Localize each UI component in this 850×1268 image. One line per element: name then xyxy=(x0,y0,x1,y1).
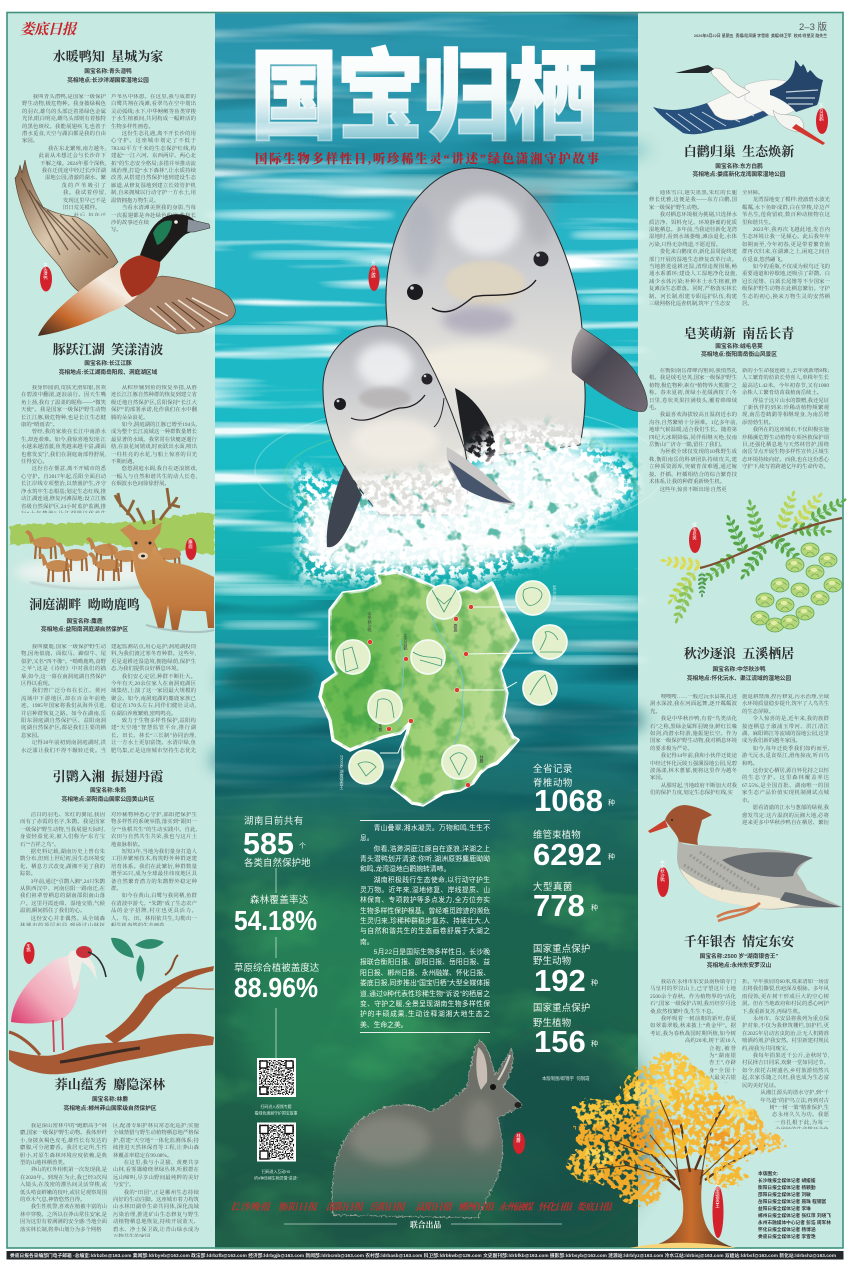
article: Chinese honey locust 皂荚萌新: 国宝名称:绒毛皂荚 xyxy=(715,344,763,350)
data column right xyxy=(533,763,615,1059)
big porpoise xyxy=(386,168,647,465)
article: forest musk deer 莽山蕴秀: 莽山的红外相机第一次发现我,是在2020年。到现在为止,我已经3次闯入镜头,在茂密的灌丛间灵活穿梭,或低头啃食鲜嫩的枝叶,或驻足观察周围的草木气息,神情悠然自得。 xyxy=(20,1167,107,1203)
article: Chinese honey locust 皂荚萌新: 新的小生命接连破土,去年就新增8株;人工繁育的幼苗长势喜人,单株年生长最高达1.42米。今年初春节,又有1000余株人工繁育幼苗栽植南岳续土。 xyxy=(742,368,829,396)
article: forest musk deer 莽山蕴秀: 我生性机警,喜欢在植被丰富的山林中穿梭。之所以在莽山常住安家,是因为这里有着满满的安全感:当地全面落实林长制,将莽山划分为多个网格 xyxy=(20,1204,107,1233)
article: scaly-sided merganser 秋沙逐浪: 秋沙逐浪 五溪栖居 xyxy=(684,646,794,661)
article: scaly-sided merganser 秋沙逐浪: 如今,每年迁徙季我们如约而至,游弋沅水,觅食渠江,滑角掠夜,听百鸟和鸣。 xyxy=(742,746,829,767)
article: river dolphin 豚跃江湖: 国宝名称:长江江豚 xyxy=(84,361,132,367)
article: tufted duck 水暖鸭知: 芦苇丛中休憩。在这里,我与成群的白鹭共翔在浅滩,看翠鸟在空中划出灵动弧线;水下,中华鳑鲏等鱼类穿梭于水生植被间,共同构成一幅鲜活的生物多样性画卷。 xyxy=(111,94,196,130)
data column right: 种 xyxy=(591,905,598,912)
article: tufted duck 水暖鸭知: 水暖鸭知 星城为家 xyxy=(53,49,163,64)
illustration: scaly-sided merganser xyxy=(648,805,842,921)
article: forest musk deer 莽山蕴秀: 莽山蕴秀 麝隐深林 xyxy=(55,1077,165,1092)
seal: crested ibis xyxy=(24,942,34,964)
illustration: Baer's pochard in flight xyxy=(15,160,235,336)
map connector lines xyxy=(380,607,533,753)
illustration: crested ibis on branch xyxy=(9,938,214,1074)
map location labels: 东方白鹳 xyxy=(404,633,408,651)
seal: forest musk deer xyxy=(513,1132,525,1154)
article: tufted duck 水暖鸭知: 亮相地点:长沙洋湖国家湿地公园 xyxy=(67,78,149,84)
reporter credits: 娄底日报全媒体记者 李雪艳 xyxy=(758,1234,816,1239)
article: tufted duck 水暖鸭知: 我叫青头潜鸭,是国家一级保护野生动物,极危物种。我身披绿褐色的羽衣,雄鸟的头部泛着墨绿色金属光泽,眼白明亮,雌鸟头部则有着独特的黑色斑纹。我能展翅疾飞,也善于潜水觅食,天空与湖泊都是我的自由家园。 xyxy=(22,94,106,144)
data column left: 草原综合植被盖度达 xyxy=(234,962,319,973)
partner newspaper logos: 永州融媒 xyxy=(498,1201,535,1213)
article: scaly-sided merganser 秋沙逐浪: 从那时起,当地政府不断加大对我们的保护力度,划定生态保护红线,实 xyxy=(650,783,737,796)
seal: oriental stork: 东方白鹳 xyxy=(819,102,824,122)
reporter credits: 邵阳日报全媒体记者 刘敏 xyxy=(758,1192,811,1197)
data column right: 野生动物 xyxy=(533,955,571,966)
QR caption 2: 扫码进入互动H5 xyxy=(262,1169,290,1174)
article: elk 洞庭湖畔: 我们曾广泛分布在长江、黄河流域中下游地区,却在百余年前绝迹。1985年国家将我们从海外引进,并启种群恢复之路。如今在湖南,岳阳东洞庭湖自然保护区、益阳南洞庭湖自然保护区,都是我们主要的栖息家园。 xyxy=(21,688,106,739)
data column right: 维管束植物 xyxy=(533,829,581,840)
small porpoise xyxy=(323,326,498,515)
article: oriental stork 白鹳归巢: 娄化来白鹳度市,新化县周旋终建部门开展的湿地生态修复改革行动。当地推进退耕还湿,清理违规围堰,畅通水系循环;建设人工湿地净化设施,减少水体污染;补种本土水生植被,修复滩涂生态群落。同时,严格落实林长制、河长制,组建专职巡护队伍,构建三级网格化巡查机制,筑牢了生态安 xyxy=(649,249,737,307)
article: ginkgo 千年银杏: 国宝名称:2500 岁“湖南银杏王” xyxy=(700,954,778,960)
article: tufted duck 水暖鸭知: 我在东北繁殖,南方越冬,此前从未想过会与长沙许下不解之缘。2024年那个深秋,我在迁徙途中经过长沙洋湖湿地公园,清澈的湖水、繁茂的芦苇吸引了我。我试着停留,发现这里早已不是旧日荒芜模样。 xyxy=(39,146,106,211)
data column left: 个 xyxy=(299,843,306,850)
graphics credit: 本版制图/郎锦宇 何钢霞 xyxy=(542,1076,590,1081)
QR caption 1: 扫码进入视频专题 xyxy=(260,1104,292,1109)
seal: oriental stork xyxy=(816,102,828,134)
data column right: 野生植物 xyxy=(533,1017,571,1028)
article: crested ibis 引鹮入湘: 洁白的羽毛、朱红的翼尾,我因而有了赤霞的名字,朱鹮。我是国家一级保护野生动物,当我展翅天际时,身姿轻盈优美,被人们称为“东方宝石”“吉祥之鸟”。 xyxy=(20,812,105,848)
article: Chinese honey locust 皂荚萌新: 在衡阳南岳群峰沟壑间,我悄然扎根。我是绒毛皂荚,国家一级保护野生植物,极危物种,素有“植物界大熊猫”之称。春末夏初,黄绿小花缀满枝丫;冬日里,卷状荚果挂满枝头,覆着绵绵绒毛。 xyxy=(649,368,737,411)
map location labels: 长江江豚 xyxy=(552,584,558,602)
article: scaly-sided merganser 秋沙逐浪: 我记得14年前,我和小伙伴迁徙途中经过怀化沅陵五强溪湿地公园,见碧波荡漾,林木蔥郁,便将这里作为越冬家园。 xyxy=(650,753,737,781)
article: scaly-sided merganser 秋沙逐浪: 这份安心栖居,源自怀化持之以恒的生态守护。这里森林覆盖率达67.55%,是全国首批、湖南唯一的国家生态产品价值实现机制测试点城市。 xyxy=(742,768,829,804)
data column right: 1068 xyxy=(534,783,603,818)
article: elk 洞庭湖畔: 我叫麋鹿,国家一级保护野生动物,因角似鹿、面似马、蹄似牛、尾似驴,又名“四不像”。“呦呦鹿鸣,食野之苹”,这是《诗经》中对我们的描摹,如今,这一幕在南洞庭湖自然保护区得以重现。 xyxy=(21,644,106,687)
article: scaly-sided merganser 秋沙逐浪 xyxy=(650,646,829,826)
article: scaly-sided merganser 秋沙逐浪: 令人惊喜的是,近年来,我的族群接连栖息于溆浦玉带河、洪江清江湖、麻阳锦江等流域的湿地公园,这里成为我们新的越冬家园。 xyxy=(742,716,829,744)
article: Chinese honey locust 皂荚萌新: 为拯救全球仅发现的10株野生成株,衡阳南岳的科研团队持续攻关,建立种质资源库,突破育苗难题,通过嫁接、扦插、杆插相结合的综合繁育技术体系,让我的种群重新焕生机。 xyxy=(649,449,737,485)
partner newspaper logos: 邵阳日报 xyxy=(326,1201,364,1213)
data column right: 种 xyxy=(591,1041,598,1048)
illustration: Yangtze finless porpoises xyxy=(280,168,650,595)
QR caption 1 xyxy=(255,1104,298,1116)
map location labels: 朱鹮 xyxy=(378,723,384,733)
seal: ginkgo xyxy=(712,1170,724,1238)
article: ginkgo 千年银杏: 永州市、东安县将我列为重点保护对象,不仅为我修筑栅栏,加护栏,更在2025年启动害虫防治,让无人机精准喷洒药剂,护我安然。村里新建村规民约,视我为共同瑰宝。 xyxy=(742,1016,829,1052)
seal: crested ibis: 朱鹮 xyxy=(26,942,32,954)
article: scaly-sided merganser 秋沙逐浪: 嗖嗖嗖……一般过沅水县寨,扎进洞水深波,我在河面起舞,逐开粼粼波光。 xyxy=(650,694,737,715)
article: oriental stork 白鹳归巢: 我对栖息环境极为挑剔,只选择水质洁净、饵料充足、环境静谧的优质湿地栖息。多年前,当我途径新化龙湾湿地时,看到水域萎缩,滩涂退化,水体污染,只得无奈绕道,不愿逗留。 xyxy=(649,212,737,248)
partner newspaper logos: 衡阳日报 xyxy=(278,1201,318,1213)
illustration: oriental stork in flight xyxy=(653,60,825,145)
center water panel xyxy=(200,13,665,1250)
data column right: 全省记录 xyxy=(533,763,573,774)
seal: merganser xyxy=(657,859,669,897)
article: crested ibis 引鹮入湘: 亮相地点:邵阳南山国家公园黄山片区 xyxy=(62,797,154,803)
map species circles xyxy=(336,581,567,784)
partner newspaper logos: 岳阳日报 xyxy=(369,1201,406,1213)
article: crested ibis 引鹮入湘: 国宝名称:朱鹮 xyxy=(90,788,126,794)
QR code 1 xyxy=(257,1058,296,1097)
intro text: 青山叠翠,湘水凝灵。万物和鸣,生生不息。 xyxy=(360,825,490,842)
reporter credits: 岳阳日报全媒体记者 聂珠 程钢富 xyxy=(758,1199,826,1204)
article: scaly-sided merganser 秋沙逐浪: 亮相地点:怀化沅水、渠江流域的湿地公园 xyxy=(687,676,791,682)
article: Chinese honey locust 皂荚萌新: 亮相地点:衡阳南岳衡山风景区 xyxy=(701,352,777,358)
article: scaly-sided merganser 秋沙逐浪: 施退耕禁渔,控污修复,污水治理,全域水环境质量稳步提升,筑牢了人鸟共生的生态屏障。 xyxy=(742,694,829,715)
seal: Baer's pochard: 青头潜鸭 xyxy=(43,261,48,281)
article: elk 洞庭湖畔: 国宝名称:麋鹿 xyxy=(66,619,103,625)
honey locust flower clusters xyxy=(751,543,842,632)
article: river dolphin 豚跃江湖: 悠悠洞庭水阔,我自在逐浪嬉戏,一幅人与自然和谐共生的动人长卷,在烟波水色间徐徐舒展。 xyxy=(111,466,197,487)
article: ginkgo 千年银杏: 亮相地点:永州东安罗汉山 xyxy=(707,963,771,969)
data column right: 种 xyxy=(591,980,598,987)
article: tufted duck 水暖鸭知 xyxy=(22,49,196,233)
article: elk 洞庭湖畔 xyxy=(21,597,196,754)
article: oriental stork 白鹳归巢: 亮相地点:娄底新化龙湾国家湿地公园 xyxy=(693,172,785,178)
data column right: 192 xyxy=(534,963,586,998)
map location labels: 林麝 xyxy=(480,754,484,764)
intro text: 你看,浩渺洞庭江豚自在逐浪,洋湖之上青头潜鸭划开清波;你听,湖洲原野麋鹿呦呦和鸣,龙湾湿地白鹳婉转清啼。 xyxy=(360,846,490,873)
seal: honey locust: 绒毛皂荚 xyxy=(692,521,698,541)
article: river dolphin 豚跃江湖: 从积珍辅到鱼的恢复举措,从胜迹长江江豚自然种群的恢复到建立省级迁地自然保护区,岳阳保持“长江大保护”的部署承诺,化作我们在水中翻腾的朵朵浪花。 xyxy=(111,385,197,421)
map location labels: 2500岁·湖南银杏王 xyxy=(340,755,344,789)
illustration: forest musk deer xyxy=(332,1040,522,1218)
article: Chinese honey locust 皂荚萌新: 得益于这片山水的馈赠,我还见证了新伙伴的到来:珍稀动植物频繁观现,南岳苍鹤鹞等相继现身,为南岳增添勃勃生机。 xyxy=(742,398,829,426)
partner newspaper logos: 长沙晚报 xyxy=(230,1201,271,1213)
seal: elk: 麋鹿 xyxy=(188,538,194,550)
seal: honey locust xyxy=(689,521,701,553)
data column left: 585 xyxy=(243,827,294,861)
reporter credits: 永州市融媒体中心记者 彭浩 周军林 xyxy=(758,1220,831,1225)
footer black email strip: 娄底日报各采编部门电子邮箱 -总编室:ldrbzbs@163.com 要闻部:ldrbyeb@163.com 政法部:ldrbzfb@163.com 经济部:ldrbgjb@163.com 新闻部:ldrbcmb@163.com 农村部:ldrbasb@163.com 科卫部:ldrbkwb@126.com 文史副刊部:ldrbfkb@163.com 摄影部:ldrbsyb@163.com 涟源站:ldrblyz@163.com 冷水江站:ldrbisj@163.com 双峰站:ldrbsf@163.com 新化站:ldrbshz@163.com xyxy=(10,1252,836,1259)
map location labels: 麋鹿 xyxy=(454,623,458,633)
illustration: elk herd in wetland xyxy=(10,513,214,589)
QR caption 1: 看绿色潇湘守护国宝故事 xyxy=(255,1110,298,1116)
seal: Baer's pochard xyxy=(40,261,52,292)
illustration: ginkgo tree xyxy=(567,1051,784,1248)
article: crested ibis 引鹮入湘 xyxy=(20,769,197,926)
percentages xyxy=(234,905,318,1003)
masthead logo: 娄底日报 xyxy=(20,22,76,38)
data column right: 种 xyxy=(608,854,615,861)
article: oriental stork 白鹳归巢: 全屏障。 xyxy=(742,190,763,196)
data column left: 各类自然保护地 xyxy=(244,857,311,868)
article: forest musk deer 莽山蕴秀: 区,配备专职护林员常态化巡护;实施全域禁猎与野生动植物栖息地严格保护,搭建“天空地”一体化监测体系;持续推进天然林保育等工程,让莽山森林覆盖率稳定在99.08%。 xyxy=(113,1123,199,1159)
water splash xyxy=(286,416,643,592)
article: elk 洞庭湖畔: 亮相地点:益阳南洞庭湖自然保护区 xyxy=(41,627,128,633)
article: oriental stork 白鹳归巢: 国宝名称:东方白鹳 xyxy=(715,164,763,170)
article: forest musk deer 莽山蕴秀 xyxy=(20,1077,199,1237)
partner newspaper logos: 怀化日报 xyxy=(538,1201,573,1213)
map species line icons xyxy=(343,588,562,776)
QR caption 2: 听9种珍稀生物灵情“讲述” xyxy=(254,1176,299,1180)
intro text xyxy=(360,820,490,1033)
article: elk 洞庭湖畔: 洞庭湖畔 呦呦鹿鸣 xyxy=(29,597,140,612)
article: forest musk deer 莽山蕴秀: 我是深山密林中的“跑酷高手”林麝,国家一级保护野生动物。我体形纤小,身披灰褐色皮毛,雄性长有发达的麝腺,可分泌麝香。我居无定所,生性胆小,对原生森林环境应度依赖,是典型的山地林栖兽类。 xyxy=(20,1123,107,1166)
seal: forest musk deer: 林麝 xyxy=(516,1132,522,1144)
article: tufted duck 水暖鸭知: 当看水清滩美照我的身影,当每一次振翅都是奔赴绿色约定,我和长沙的故事还在续写。 xyxy=(111,205,196,233)
article: crested ibis 引鹮入湘: 3年前,通过“引鹮入湘”,24只朱鹮从陕西汉中、河南信阳一路南迁,在我们祖辈曾栖息的湖南邵阳南山落户。这里丹霞连绵、湿地交错,气候温润,瞬间抓住了我们的心。 xyxy=(20,879,105,914)
article: ginkgo 千年银杏: 折。早年我肩的60米,填来清如一场雷击将我们撕裂,伤疤深及根脉。多年风雨侵蚀,更在树干形成巨大的空心树洞。但在当地政府和村民的悉心呵护下,我重新复苏,再绿生机。 xyxy=(742,979,829,1015)
page number and editors: 2–3 版 xyxy=(799,22,827,33)
seal: Yangtze porpoise xyxy=(368,259,380,291)
article: oriental stork 白鹳归巢: 白鹳归巢 生态焕新 xyxy=(684,144,794,159)
article: oriental stork 白鹳归巢: 2023年,我再次飞越此地,发自内生态环境让我一见倾心。此后我年年如期而至,今年初春,更是带着繁育族群再次归来,在湖滩之上,闲庭之间自在觅食,悠然翩飞。 xyxy=(742,227,830,263)
partner newspaper logos: 益阳日报 xyxy=(415,1201,453,1213)
article: ginkgo 千年银杏 xyxy=(650,934,829,1129)
intro text: 湖南积极践行生态使命,以行动守护生灵万物。近年来,湿地修复、岸线提质、山林保育、专项救护等多点发力,全方位夯实生物多样性保护根基。曾经难觅踪迹的濒危生灵归来,珍稀种群稳步复苏、持续壮大,人与自然和谐共生的生态画卷舒展于大湖之南。 xyxy=(360,877,490,946)
data column left: 森林覆盖率达 xyxy=(250,894,309,905)
article: Chinese honey locust 皂荚萌新 xyxy=(649,326,829,492)
article: tufted duck 水暖鸭知: 这份生态礼遇,离不开长沙的用心守护。这座城市划定了不低于783.82平方千米的生态保护红线,构建起“一江六河、东西两岸、两心北拓”的生态安全格局;多措并举推动流域治理,打造“水下森林”,让水质持续改善,从搭建自然保护地到建设生态廊道,从修复湿地到建立长效管护机制,自来拥城以行动守护一方水土,用温情拥抱万物生灵。 xyxy=(111,131,196,204)
article: oriental stork 白鹳归巢 xyxy=(649,144,830,307)
article: forest musk deer 莽山蕴秀: 国宝名称:林麝 xyxy=(92,1097,128,1103)
article: river dolphin 豚跃江湖: 豚跃江湖 笑漾清波 xyxy=(53,342,163,357)
reporter credits: 郴州日报全媒体记者 张红萍 刘晓飞 xyxy=(758,1213,831,1218)
article: crested ibis 引鹮入湘: 对珍稀物种悉心守护,邵阳把保护生物多样性的系统举措,落实到“跟田一分”“鱼稻共生”的生动实践中。自此,农田与自然共生共荣,我也与这片土地血脉相依。 xyxy=(111,812,197,848)
partner newspaper logos xyxy=(230,1201,613,1213)
data column right: 6292 xyxy=(533,837,602,872)
reporter credits: 益阳日报全媒体记者 李琳 xyxy=(758,1206,811,1211)
article: forest musk deer 莽山蕴秀: 在这里,我与小灵猫、黄麂共享山林,看雾霭缭绕翠绿丛林,听猴群在远山啼叫,尽享山野间最纯粹的美好与安宁。 xyxy=(113,1160,199,1188)
QR caption 2 xyxy=(254,1169,299,1180)
data column right: 大型真菌 xyxy=(533,881,573,892)
article: ginkgo 千年银杏: 我每年捐果近千公斤,金秋时节,村民择吉日同采,欢聚一堂如同过节。如今,依托古树盛名,乡村旅游悄然兴起,农家乐随之兴旺,我也成为生态富民的美好见证。 xyxy=(742,1053,829,1089)
data column right: 种 xyxy=(608,800,615,807)
seal: ginkgo: 2500岁·湖南银杏王 xyxy=(715,1170,720,1208)
article: river dolphin 豚跃江湖: 如今,洞庭湖的江豚已增至194头,成为整个长江流域这一种群数量增长最显著的水域。我常常在快艇逐遛行舫,在浪花间嬉戏,时而跃出水面,喷出一柱柱亮的水花,与船上惊喜的目光不期而遇。 xyxy=(111,422,197,465)
page number and editors xyxy=(694,22,827,38)
article: river dolphin 豚跃江湖: 我身形圆润,皮肤光滑如银,喜欢在碧波中翻滚,逐浪前行。因天生嘴角上扬,我有了温柔的昵称——“微笑天使”。我是国家一级保护野生动物长江江豚,极危物种,也是长江生态健康的“晴雨表”。 xyxy=(21,385,106,428)
divider lines between stats xyxy=(275,868,277,1058)
data column right: 国家重点保护 xyxy=(533,1002,590,1013)
data column right: 778 xyxy=(533,888,585,923)
QR code 2 xyxy=(257,1122,296,1162)
article: Chinese honey locust 皂荚萌新: 我所在的这座城市,不仅积极实施珍稀濒危野生动植物专项拯救保护项目,还强化栖息地与天然林管护,围绕南岳节点开展生物多样性宣传,区域生态环境持续向好。而我,也在这份悉心守护下,续写着跨越亿年的生命传奇。 xyxy=(742,427,829,470)
illustration: elk stag xyxy=(115,488,214,632)
title: 国宝归栖 xyxy=(250,42,598,152)
article: river dolphin 豚跃江湖: 亮相地点:长江湖南岳阳段、洞庭湖区域 xyxy=(59,370,157,376)
reporter credits: 本版图文: xyxy=(758,1171,778,1176)
seal: merganser: 中华秋沙鸭 xyxy=(660,859,666,883)
data column left xyxy=(234,815,319,1003)
article: oriental stork 白鹳归巢: 通体雪白,翅尖墨黑,朱红的长腿修长优雅,这便是我——东方白鹳,国家一级保护野生动物。 xyxy=(649,190,737,211)
illustration: honey locust branch xyxy=(659,488,850,632)
reporter credits: 怀化日报全媒体记者 杨博涵 xyxy=(758,1227,816,1232)
seal: elk xyxy=(186,538,196,560)
article: crested ibis 引鹮入湘: 短短3年,当地为我们量身打造人工招养繁殖技术,构筑野外种群逐建培育体系。我们在此繁衍,种群数量增至35只,成为全球最佳纬度地区具备自然繁育潜力的朱鹮野外稳定种群。 xyxy=(111,849,197,892)
seal: Yangtze porpoise: 长江江豚 xyxy=(371,259,376,279)
subtitle: 国际生物多样性日,听珍稀生灵“讲述”绿色潇湘守护故事 xyxy=(255,151,600,166)
article: scaly-sided merganser 秋沙逐浪: 我是中华秋沙鸭,有着“鸟类活化石”之称,黑绿金属辉羽镀身,鲜红长喙如剑,尚潜水特游,施振翅长空。作为国家一级保护野生动物,我对栖息环境的要求极为严苛。 xyxy=(650,716,737,752)
data column right: 国家重点保护 xyxy=(533,943,590,954)
data column right: 156 xyxy=(534,1024,586,1059)
partner newspaper logos: 郴州日报 xyxy=(458,1201,495,1213)
reporter credits: 衡阳日报全媒体记者 杨颖勤 xyxy=(758,1185,816,1190)
partner newspaper logos: 娄底日报 xyxy=(576,1201,613,1213)
article: elk 洞庭湖畔: 建起监测站点,用心巡护;洞庭湖投饲料,为我们渡过寒冬育种群。这些年,更是退耕还湿造境,拥抱绿荫,保护生态,为我们提供良好栖息环境。 xyxy=(111,644,196,672)
page number and editors: 2026年5月22日 星期五 责编/段凤婕 李雪艳 美编/林卫军 校对/肖望灵 路先兰 xyxy=(694,33,827,38)
article: scaly-sided merganser 秋沙逐浪: 国宝名称:中华秋沙鸭 xyxy=(712,667,766,673)
article: crested ibis 引鹮入湘: 据史料记载,湖南历史上曾有朱鹮分布,但到上世纪初,因生态环境变化、栖息方式改变,湖湘不见了我的踪影。 xyxy=(20,849,105,877)
intro text: 5月22日是国际生物多样性日。长沙晚报联合衡阳日报、邵阳日报、岳阳日报、益阳日报、郴州日报、永州融媒、怀化日报、娄底日报,同步推出“国宝归栖”大型全媒体报道,通过9种代表性珍稀生物“诉说”的栖居之变、守护之暖,全景呈现湖南生物多样性保护的丰硕成果,生动诠释湖湘大地生态之美、生命之美。 xyxy=(360,949,490,1029)
article: elk 洞庭湖畔: 我们安心定居,种群不断壮大。今年有天,20余位家人在南洞庭湖区域集结,上演了这一家园最大规模的聚会。如今,南洞庭湖的麋鹿家族已稳定在170头左右,同伴们健壮灵动,在湖泊养殖繁殖,密鸣鸣亮。 xyxy=(111,674,196,717)
article: Chinese honey locust 皂荚萌新: 皂荚萌新 南岳长青 xyxy=(684,326,794,341)
article: tufted duck 水暖鸭知: 国宝名称:青头潜鸭 xyxy=(84,69,132,75)
data column right: 脊椎动物 xyxy=(533,777,573,788)
article: crested ibis 引鹮入湘: 引鹮入湘 振翅丹霞 xyxy=(53,769,163,784)
article: Chinese honey locust 皂荚萌新: 这些年,惊喜不断出现:自然更 xyxy=(660,486,727,492)
article: forest musk deer 莽山蕴秀: 亮相地点:郴州莽山国家级自然保护区 xyxy=(64,1106,156,1112)
article: ginkgo 千年银杏: 我站在永州市东安县南桥镇寺门马皇村的罗汉山上,已守望这片土地2500余个春秋。作为植物界的“活化石”,国家一级保护古树,我历经岁月沧桑,依然枝繁叶茂,生生不息。 xyxy=(650,979,736,1015)
article: oriental stork 白鹳归巢: 如今的重瓶,不仅成为候鸟迁飞的重要通道和停歇地,还吸引了彩鹮、白冠长尾雉、白颈长尾雉等不少国家一级保护野生动物在此栖息繁衍。守护生态的初心,换来万物生灵的安然栖居。 xyxy=(742,264,830,307)
map location labels: 中华秋沙鸭 xyxy=(368,611,372,633)
data column left: 湖南目前共有 xyxy=(244,815,304,826)
article: river dolphin 豚跃江湖 xyxy=(21,342,197,513)
reporter credits xyxy=(758,1170,831,1239)
map of Hunan xyxy=(315,565,567,810)
article: Chinese honey locust 皂荚萌新: 我最喜欢海拔较高且温润近水的沟谷,自然繁殖十分困难。1亿多年前,地球气候温暖,适合我们生长。随着第四纪大冰期降临,同伴相继灭绝,仅南岳衡山广济寺一隅,留住了我们。 xyxy=(649,412,737,448)
article: river dolphin 豚跃江湖: 曾经,我的家族在长江中南游水生,却连艰难。如今,我惊喜地发现:江水越来越清澈,鱼类越来越丰富,湖面也愈发安宁,我们在洞庭南部得舒展,任得安心。 xyxy=(21,429,106,465)
reporter credits: 长沙晚报全媒体记者 胡媛媛 xyxy=(758,1178,816,1183)
map location dots xyxy=(368,605,473,787)
joint production line: 联合出品 xyxy=(410,1220,441,1230)
article: oriental stork 白鹳归巢: 龙湾湿地变了模样:澄澈碧水波光粼粼,水下鱼虾成群,白在穿梭,岸边芦苇丛生,莲荷留痕,数百种动植物在这里和谐共生。 xyxy=(742,197,830,226)
map location labels xyxy=(340,584,558,789)
article: ginkgo 千年银杏: 千年银杏 情定东安 xyxy=(684,934,794,949)
